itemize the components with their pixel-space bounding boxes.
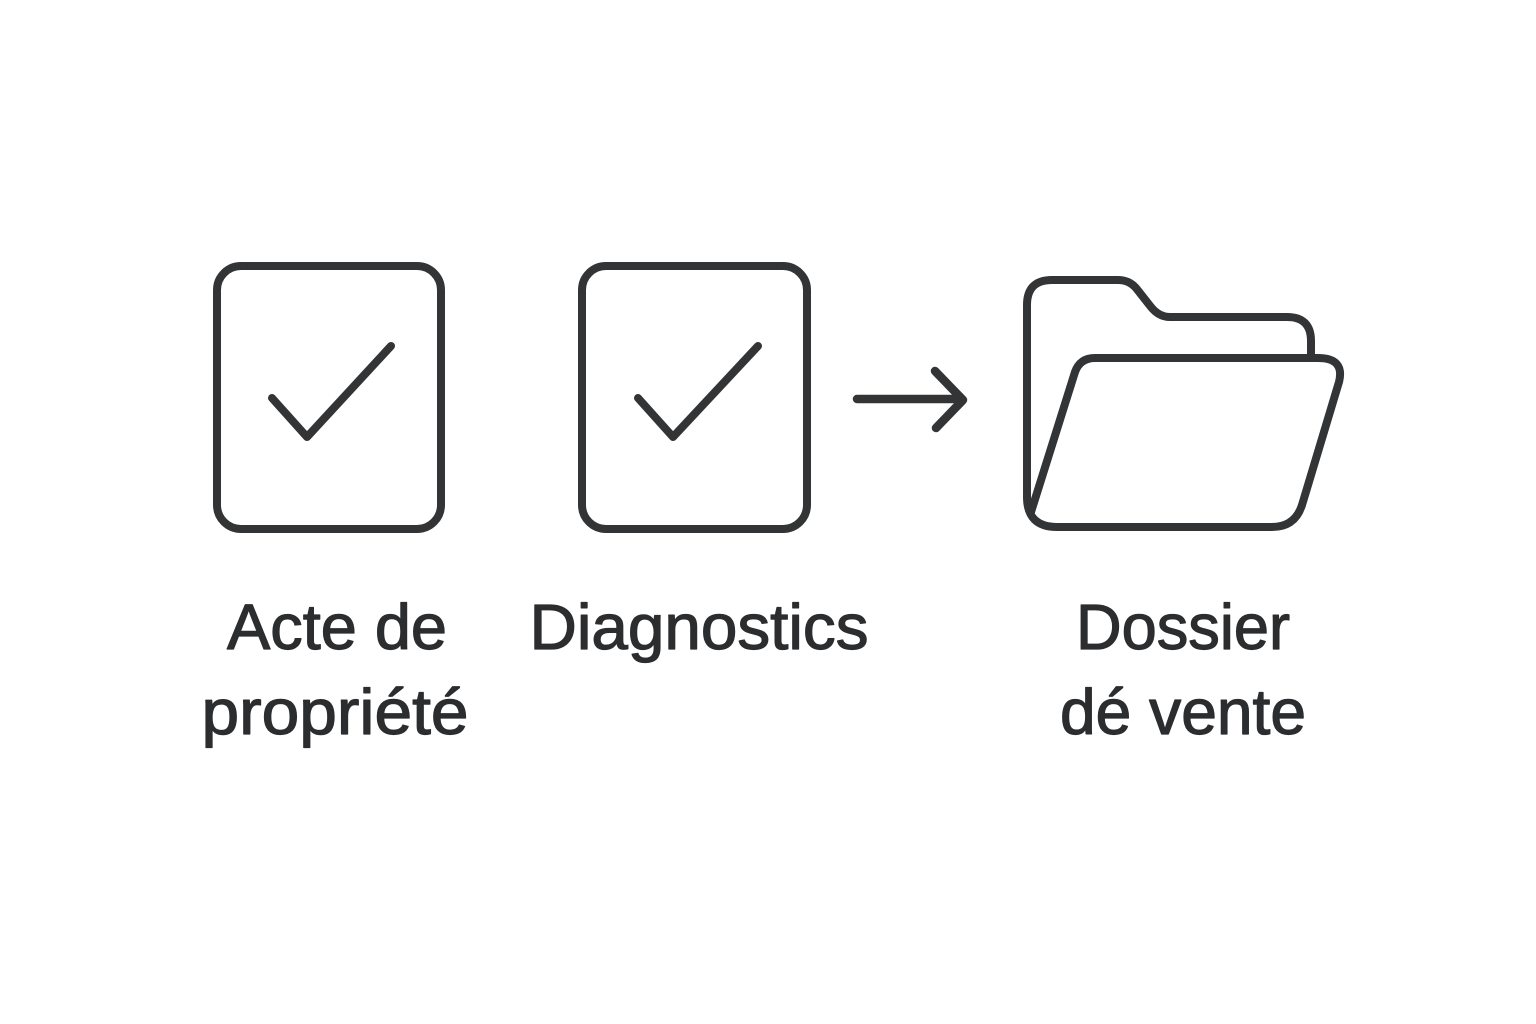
icon: checked document, diagnostics: [582, 266, 807, 529]
label: Dossier dé vente: dé vente: [1060, 676, 1306, 748]
label: Diagnostics: Diagnostics: [530, 591, 868, 663]
label: Acte de propriété: [202, 591, 468, 748]
label: Acte de propriété: propriété: [202, 676, 468, 748]
label: Dossier dé vente: Dossier: [1076, 591, 1290, 663]
label: Dossier dé vente: [1060, 591, 1306, 748]
arrow: [857, 371, 963, 428]
icon: open folder: [1027, 280, 1340, 527]
label: Acte de propriété: Acte de: [227, 591, 447, 663]
icon: checked document, property deed: [217, 266, 441, 529]
